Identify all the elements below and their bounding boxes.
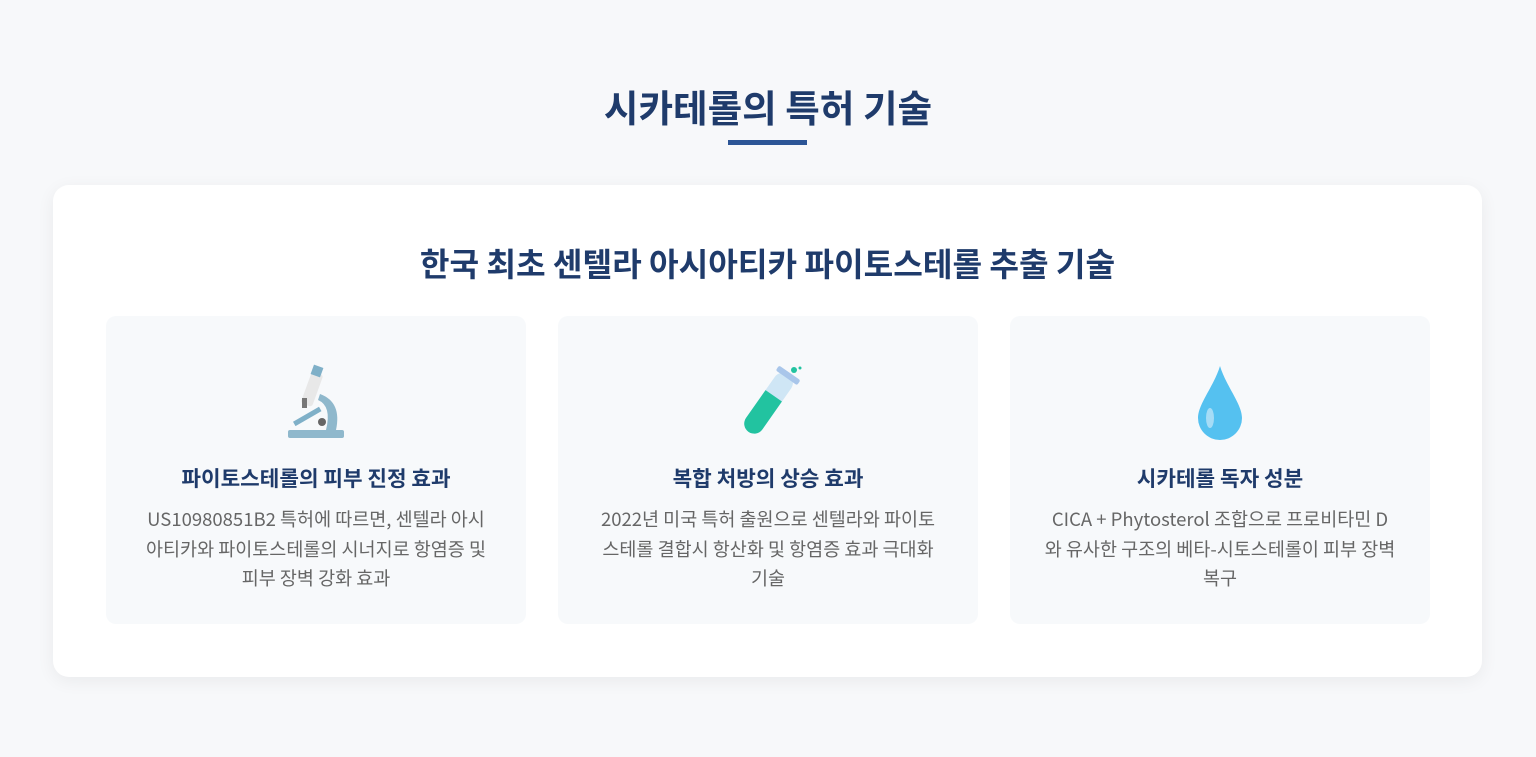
icon: water drop <box>1198 366 1242 440</box>
text <box>1045 506 1395 591</box>
icon: test tube <box>744 366 802 434</box>
text: 2022년 미국 특허 출원으로 센텔라와 파이토스테롤 결합시 항산화 및 항염증 효과 극대화 기술 <box>601 506 935 591</box>
title: 시카테롤의 특허 기술 <box>604 78 932 133</box>
heading: 복합 처방의 상승 효과 <box>673 462 863 493</box>
card: exclusive ingredient <box>1010 316 1430 624</box>
card: skin soothing <box>106 316 526 624</box>
heading: 파이토스테롤의 피부 진정 효과 <box>181 462 451 493</box>
panel: patent technology <box>53 185 1482 677</box>
text: 복구 <box>1203 565 1237 591</box>
text: 와 유사한 구조의 베타-시토스테롤이 피부 장벽 <box>1045 536 1395 562</box>
subtitle: 한국 최초 센텔라 아시아티카 파이토스테롤 추출 기술 <box>420 240 1115 286</box>
heading: 시카테롤 독자 성분 <box>1137 462 1303 493</box>
text: CICA + Phytosterol 조합으로 프로비타민 D <box>1052 506 1388 532</box>
icon: microscope <box>288 364 344 438</box>
card: synergy <box>558 316 978 624</box>
title underline <box>728 140 807 145</box>
text: US10980851B2 특허에 따르면, 센텔라 아시아티카와 파이토스테롤의 시너지로 항염증 및 피부 장벽 강화 효과 <box>146 506 486 591</box>
